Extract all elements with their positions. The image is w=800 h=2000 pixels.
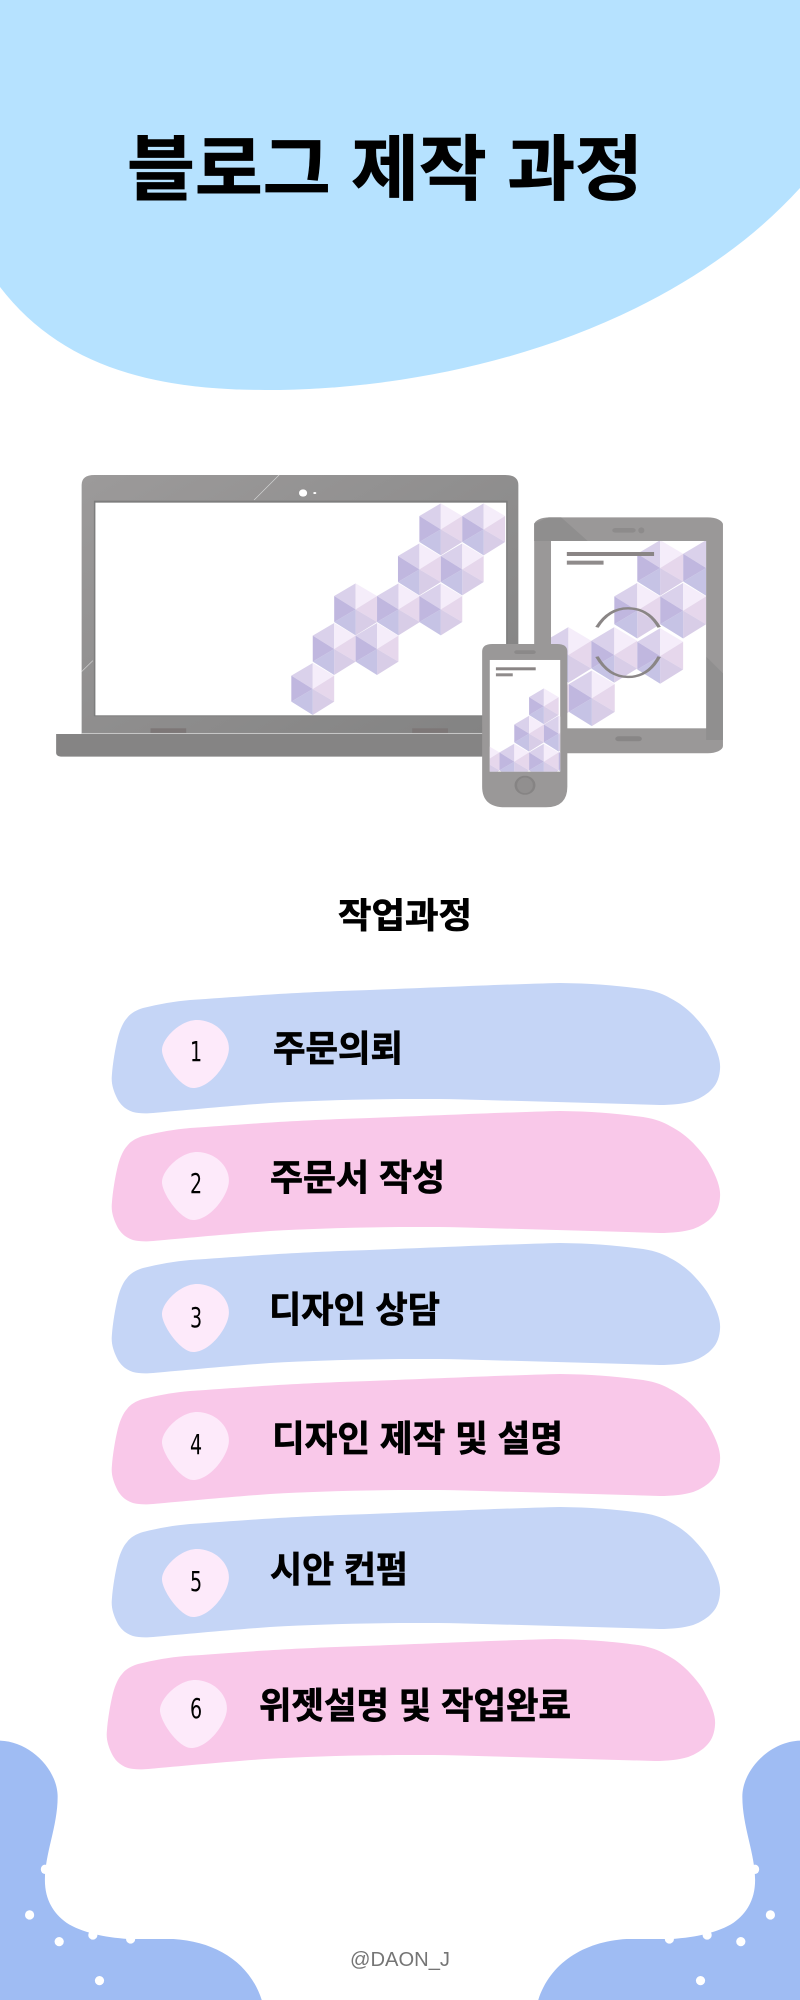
step 4: 4 xyxy=(190,1428,202,1461)
step 3 xyxy=(112,1243,720,1373)
step 5: 5 xyxy=(190,1565,202,1598)
step 6: 6 xyxy=(190,1692,202,1725)
step 5 xyxy=(112,1507,720,1637)
step 5: 시안 컨펌 xyxy=(270,1549,408,1590)
bottom right blue corner shape xyxy=(538,1741,800,2000)
step 1 xyxy=(112,983,720,1113)
step 6: 위젯설명 및 작업완료 xyxy=(259,1685,571,1726)
device mockups xyxy=(56,475,729,807)
step 2: 주문서 작성 xyxy=(270,1157,445,1198)
phone xyxy=(482,644,568,808)
top blue header shape xyxy=(0,0,800,390)
title: 블로그 제작 과정 xyxy=(127,131,643,210)
step 6 xyxy=(107,1639,715,1769)
step 1: 1 xyxy=(190,1035,202,1068)
step 4: 디자인 제작 및 설명 xyxy=(272,1418,563,1459)
step 3: 3 xyxy=(190,1301,202,1334)
tablet xyxy=(523,517,729,753)
bottom left blue corner shape xyxy=(0,1741,262,2000)
step 2 xyxy=(112,1111,720,1241)
credit handle: @DAON_J xyxy=(350,1949,450,1971)
step 2: 2 xyxy=(190,1167,202,1200)
step 1: 주문의뢰 xyxy=(273,1028,403,1069)
laptop xyxy=(56,475,518,757)
step 4 xyxy=(112,1374,720,1504)
step 3: 디자인 상담 xyxy=(269,1289,440,1330)
section heading: 작업과정 xyxy=(338,897,472,936)
